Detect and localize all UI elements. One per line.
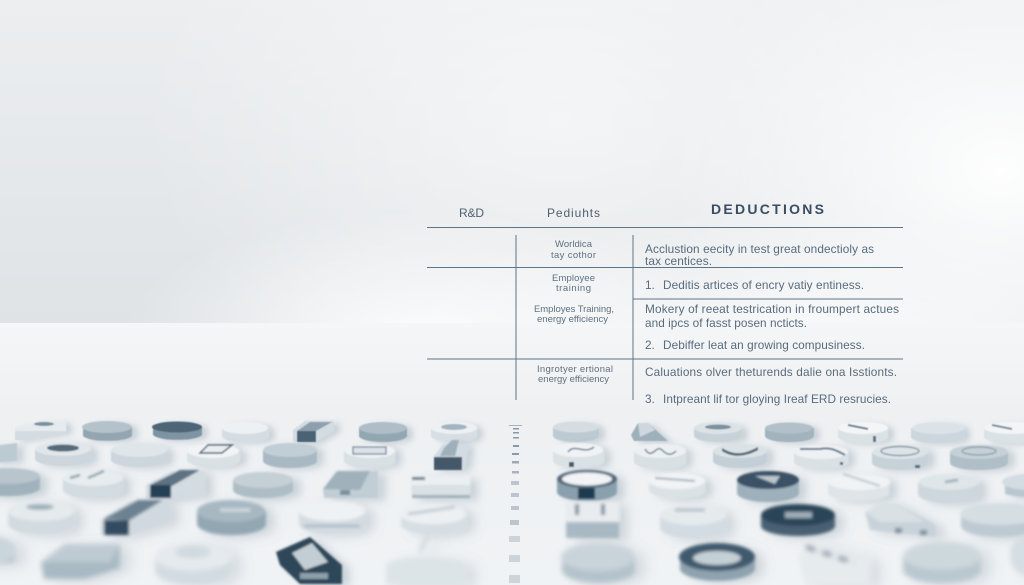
token: white disc [400,504,466,534]
right column descriptions: 3. [645,392,655,406]
token: light disc [155,543,231,584]
token: partial light disc [1010,535,1024,575]
deductions table [427,201,903,406]
row 3 of tokens [0,468,1024,503]
token: partial light disc [1002,474,1024,497]
dotted centre divider [509,425,522,583]
token: partial box [0,443,17,463]
right column descriptions: Debiffer leat an growing compusiness. [663,338,865,352]
column header: R&D: R&D [459,206,484,220]
token: partial gray disc [0,468,40,496]
token: dark ring disc [679,543,755,581]
right column descriptions: Deditis artices of encry vatiy entiness. [663,278,864,292]
middle column labels: Ingrotyer ertional [537,364,613,375]
middle column labels: Employee [552,273,595,284]
column header: DEDUCTIONS: DEDUCTIONS [711,201,824,217]
middle column labels: tay cothor [551,250,596,261]
background: studio wall and floor [0,78,1024,323]
token: gray disc [233,472,293,498]
row 5 of tokens [0,536,231,584]
token: light disc [918,474,979,503]
token: light disc [694,422,742,442]
token: dark block [276,537,342,584]
middle column labels: training [556,283,591,294]
middle column labels: energy efficiency [538,374,609,385]
middle column labels: energy efficiency [537,314,608,325]
token: gray disc ring [950,445,1008,470]
right column descriptions: and ipcs of fasst posen ncticts. [645,316,807,330]
token: pale block [323,471,378,498]
token: white disc [299,501,365,534]
token: light block [865,503,936,537]
right column descriptions: Caluations olver theturends dalie ona Isstionts. [645,365,897,379]
right column descriptions: Intpreant lif tor gloying Ireaf ERD resrucies. [663,392,891,406]
token: dark disc [737,471,799,502]
token: light disc [660,505,726,538]
token: peaked gray piece [631,423,668,441]
token: gray block [41,544,120,579]
token: light disc [8,501,74,534]
token: light disc with dark icon [35,442,91,466]
token: box with dark face [434,440,468,470]
right column descriptions: Mokery of reeat testrication in froumpert actues [645,302,899,316]
middle column labels [534,239,614,385]
token: dark disc [152,422,202,440]
token: gray disc [765,422,814,442]
token: white disc with curve [794,445,848,469]
token: white disc [634,444,686,469]
middle column labels: Worldica [555,239,593,250]
token: gray disc [263,443,317,468]
token: gray disc [359,422,407,442]
token: white disc [838,422,888,443]
token: box with dark face [146,470,205,499]
token: light disc ring [872,445,928,470]
right column descriptions: 1. [645,278,655,292]
row 4 of tokens [8,500,1024,538]
token: gray disc [197,500,266,535]
token: dark disc [761,504,835,536]
right column descriptions: tax centices. [645,254,712,268]
token: light disc with curve [713,444,767,468]
token: light disc [63,470,123,498]
token: light disc [431,422,477,442]
token: light disc [903,542,981,583]
token: white block [411,476,470,498]
right column descriptions [645,242,899,406]
row 1 of tokens [15,421,1024,443]
token: white disc [828,474,890,501]
token: box with dark face [293,421,334,442]
token: gray disc [82,421,132,441]
token: dark ring disc [557,470,617,501]
token: box with dark face [101,500,170,535]
token: pale bottle shape [386,535,465,585]
token: light disc [911,422,964,443]
right column descriptions: Acclustion eecity in test great ondectioly as [645,242,874,256]
token: light disc [553,422,599,442]
middle column labels: Employes Training, [534,304,614,315]
row 2 of tokens [0,440,1008,470]
token: pale block [566,502,619,538]
token: white disc [649,473,705,498]
token: white disc with frame [344,444,395,468]
token: light disc [222,422,269,442]
token: partial gray disc [0,536,16,564]
token: white disc [984,422,1024,443]
table rules [427,228,903,400]
column header: Pediuhts: Pediuhts [547,206,600,220]
token: white disc [553,443,604,468]
token: light disc [111,443,167,467]
token: white disc with frame [187,444,240,467]
token: light disc [960,503,1024,537]
token: white box [15,421,66,440]
token: white piece [798,544,870,585]
right column descriptions: 2. [645,338,655,352]
token: light disc [561,543,635,583]
